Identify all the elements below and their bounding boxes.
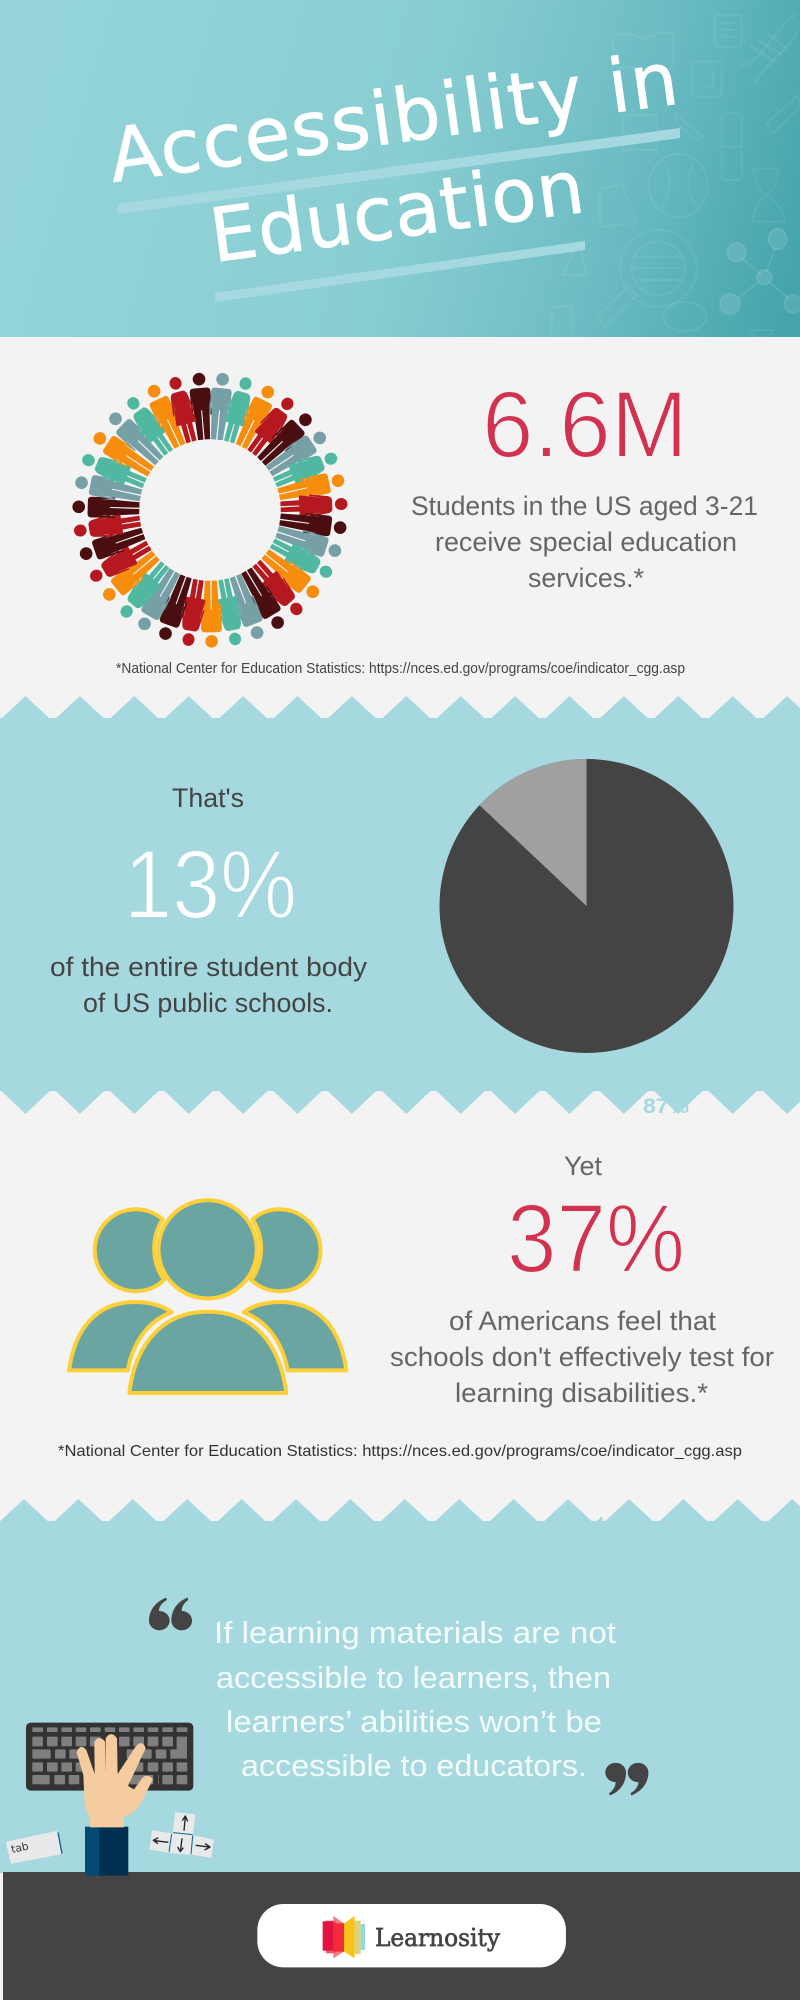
zigzag top edge — [0, 1499, 598, 1522]
logo badge: Learnosity — [257, 1904, 566, 1967]
title: Education: Education — [205, 144, 589, 280]
text block: student body: of the entire student body — [50, 952, 368, 982]
text block: student body: of US public schools. — [83, 988, 333, 1018]
title: Accessibility in: Accessibility in — [104, 36, 683, 200]
icon: keyboard — [26, 1723, 193, 1791]
footnote: source: *National Center for Education Statistics: https://nces.ed.gov/programs/coe/indicator_cgg.asp — [116, 661, 685, 677]
panel: 37 percent — [58, 1151, 774, 1460]
icon: group of three people — [69, 1200, 346, 1393]
footnote: source: *National Center for Education Statistics: https://nces.ed.gov/programs/coe/indicator_cgg.asp — [58, 1443, 742, 1460]
text block: students description: services.* — [528, 563, 644, 593]
big number: 6.6M: 6.6M — [482, 372, 688, 478]
header banner — [0, 0, 800, 338]
pie chart: 13 vs 87 percent — [440, 759, 734, 1053]
icon: arrow keys — [150, 1813, 213, 1857]
panel: 13 percent — [0, 696, 800, 1118]
panel: quote — [0, 1499, 800, 1873]
text block: students description: Students in the US aged 3-21 — [411, 491, 758, 521]
icon: closing quote mark — [605, 1763, 648, 1795]
icon: molecule — [720, 229, 800, 314]
quote text: If learning materials are not — [214, 1615, 616, 1650]
text block: testing description: learning disabilities.* — [455, 1378, 709, 1408]
icon: opening quote mark — [149, 1598, 192, 1630]
footer bar — [3, 1872, 800, 2000]
text block: testing description: of Americans feel that — [449, 1306, 717, 1336]
text: Yet: Yet — [564, 1151, 602, 1181]
pie label: 87%: 87% — [643, 1095, 689, 1118]
panel: 6.6M students — [72, 372, 758, 677]
quote text: accessible to educators. — [241, 1748, 587, 1783]
text block: testing description: schools don't effectively test for — [390, 1342, 774, 1372]
icon: ring of people — [72, 372, 348, 648]
quote text — [214, 1615, 616, 1783]
big number: 13%: 13% — [124, 830, 297, 939]
text block: students description — [411, 491, 758, 593]
icon: Learnosity book logo — [323, 1916, 365, 1958]
illustration: hand on keyboard — [7, 1723, 213, 1876]
quote text: learners’ abilities won’t be — [226, 1704, 602, 1739]
text block: students description: receive special education — [435, 527, 737, 557]
zigzag bottom edge — [0, 1091, 800, 1114]
decorative underline: first title line — [118, 128, 680, 214]
icon: tab key: tab — [10, 1840, 30, 1856]
quote text: accessible to learners, then — [216, 1660, 611, 1695]
decorative underline: second title line — [215, 241, 585, 302]
text block: student body — [50, 952, 368, 1018]
icon: tab key — [7, 1832, 63, 1863]
icon: hand — [77, 1734, 153, 1827]
text: That's: That's — [172, 783, 244, 813]
icon: faint education doodles — [552, 13, 800, 338]
text block: testing description — [390, 1306, 774, 1408]
big number: 37%: 37% — [507, 1184, 685, 1293]
icon: sleeve — [85, 1827, 128, 1876]
wordmark: Learnosity — [375, 1924, 500, 1952]
zigzag top edge — [0, 696, 800, 718]
